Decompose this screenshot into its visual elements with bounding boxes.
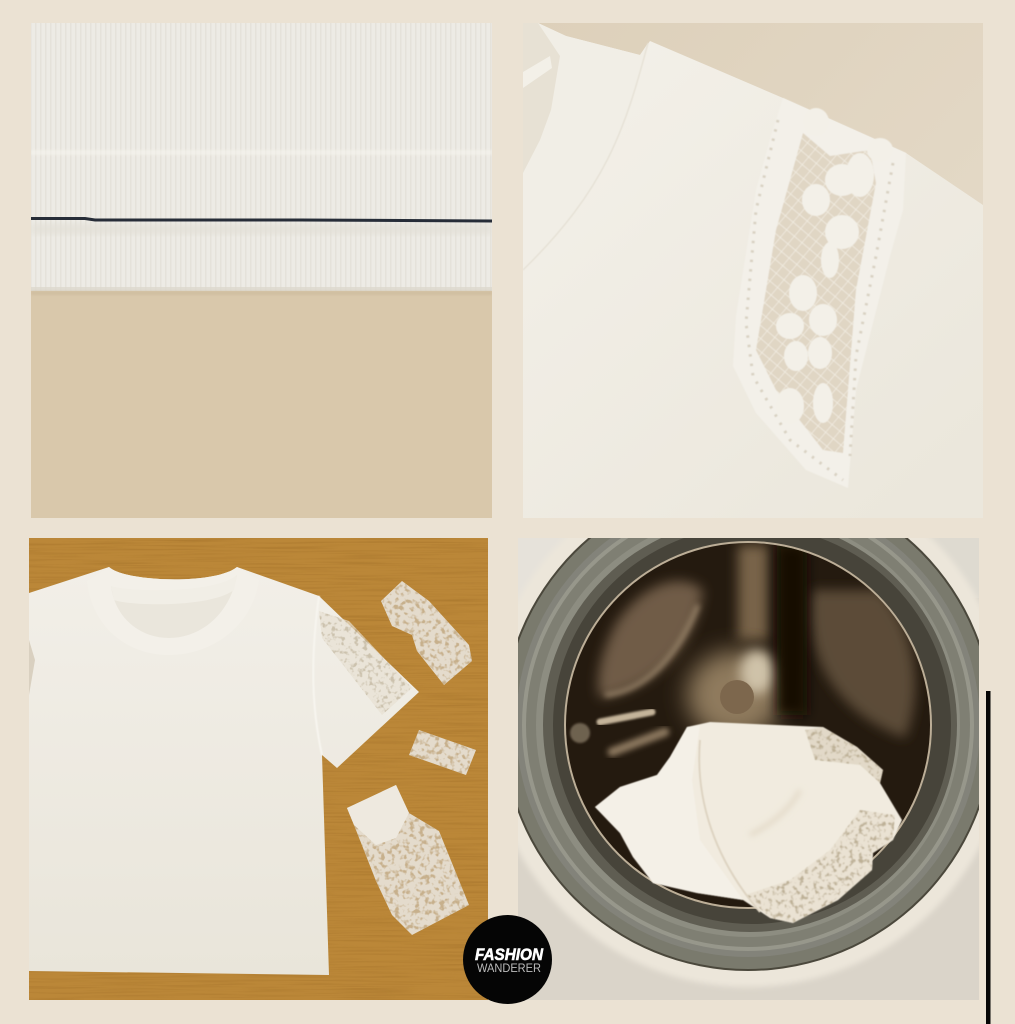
metal drum [564, 541, 932, 909]
gasket rings [518, 538, 979, 971]
collar [538, 23, 648, 55]
shadow under hem [32, 290, 492, 294]
collar [108, 567, 238, 580]
sleeve lace [319, 611, 412, 715]
black vertical rule [986, 691, 990, 1024]
lace flowers [776, 108, 893, 424]
drum centre column [738, 545, 768, 640]
shirt body [523, 23, 983, 518]
logo badge: Fashion Wanderer: FASHION [475, 946, 544, 964]
drum hub [720, 680, 754, 714]
lace garment [595, 722, 902, 923]
drum paddle: left [598, 581, 703, 698]
lace scrap: top [381, 581, 472, 685]
t-shirt [29, 567, 419, 975]
back of neck band [111, 575, 237, 604]
lace border [733, 98, 906, 488]
ribbed white fabric [31, 23, 492, 291]
collar seam [523, 43, 648, 270]
reflections lower-left [600, 712, 652, 722]
photo panel: t-shirt shoulder with lace insert [523, 23, 983, 518]
lace dotted rows [746, 120, 843, 480]
photo panel: t-shirt flat lay on wood table with lace scraps [29, 538, 488, 1000]
logo badge: Fashion Wanderer [463, 915, 552, 1004]
sleeve seam [313, 596, 322, 755]
inside of neck [523, 23, 560, 173]
drum paddle: right [810, 590, 915, 738]
lace scrap: middle [409, 730, 476, 775]
left sleeve lace hint [29, 640, 35, 695]
lace panel [733, 98, 906, 488]
photo panel: ribbed hem with navy stitching [31, 23, 492, 518]
photo panel: washing machine drum with lace garment [518, 538, 979, 1000]
logo badge: Fashion Wanderer: WANDERER [477, 961, 541, 975]
lace scrap: bottom [347, 785, 469, 935]
navy stitch line [31, 218, 492, 221]
tulle mesh [756, 133, 876, 453]
door halo [518, 538, 979, 988]
